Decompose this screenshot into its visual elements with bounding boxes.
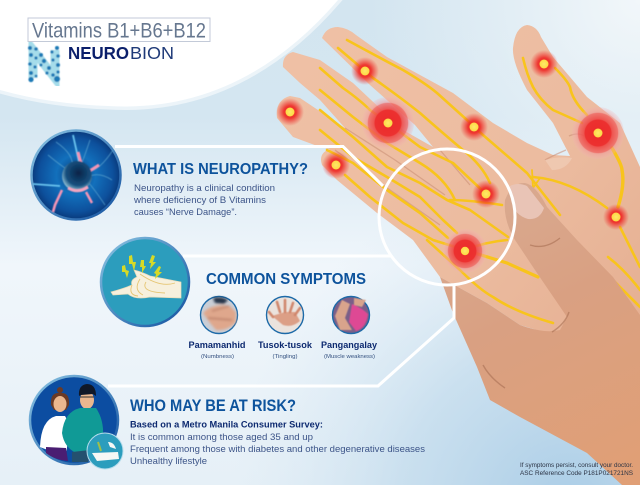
icon: tingling hand <box>101 238 189 326</box>
large pain point <box>443 229 487 273</box>
text: risk list: Frequent among those with diabetes and other degenerative diseases <box>130 444 425 455</box>
pain point <box>530 50 558 78</box>
footer note <box>520 462 634 477</box>
heading: common symptoms: COMMON SYMPTOMS <box>206 271 366 288</box>
man <box>62 384 103 462</box>
label: Pamamanhid <box>188 340 246 350</box>
heading: who may be at risk: WHO MAY BE AT RISK? <box>130 397 296 415</box>
text: neuropathy description <box>133 183 275 217</box>
hand with nerves <box>276 25 640 485</box>
vitamins text: Vitamins B1+B6+B12 <box>32 20 206 42</box>
pain point <box>472 180 500 208</box>
photo <box>200 296 238 334</box>
logo mark <box>28 46 60 82</box>
magnifier circle <box>379 149 515 285</box>
connector: neuropathy <box>115 146 383 186</box>
pain point <box>603 204 629 230</box>
photo <box>266 296 304 334</box>
text: neuropathy description: Neuropathy is a clinical condition <box>134 183 275 193</box>
heading: what is neuropathy: WHAT IS NEUROPATHY? <box>133 161 308 178</box>
footer note: ASC Reference Code P181P021721NS <box>520 470 634 477</box>
pain point <box>351 57 379 85</box>
text: risk list: It is common among those aged 35 and up <box>130 432 313 443</box>
small hand badge <box>87 433 123 469</box>
header white curve <box>0 0 338 107</box>
nerves <box>320 40 640 323</box>
icon: people at risk <box>30 376 123 469</box>
sublabel: (Numbness) <box>201 354 234 360</box>
finger shadow creases <box>335 128 584 225</box>
large pain point <box>362 97 414 149</box>
text: neuropathy description: causes “Nerve Damage”. <box>134 207 237 217</box>
brand name <box>68 43 174 63</box>
text: risk list <box>130 420 425 467</box>
text: risk list: Unhealthy lifestyle <box>130 456 207 467</box>
connector lines and magnifier <box>108 146 515 386</box>
pain point <box>276 98 304 126</box>
thumb knuckle creases <box>483 238 569 388</box>
connector: symptoms <box>183 254 391 258</box>
woman <box>40 387 70 461</box>
icon: neuron <box>32 130 120 220</box>
pain point <box>460 113 488 141</box>
pain points <box>276 50 629 273</box>
footer note: If symptoms persist, consult your doctor. <box>520 462 633 469</box>
symptom: muscle weakness <box>321 296 377 360</box>
examined hand silhouette <box>277 25 640 337</box>
connector: risk <box>108 285 454 386</box>
sublabel: (Muscle weakness) <box>324 354 375 360</box>
holding hand <box>440 183 640 485</box>
sublabel: (Tingling) <box>272 354 298 360</box>
brand name: BION <box>130 43 174 63</box>
thumbnail <box>510 184 544 219</box>
label: Tusok-tusok <box>258 340 313 350</box>
brand name: NEURO <box>68 43 129 63</box>
vitamins label <box>28 18 210 42</box>
brand box <box>28 18 210 42</box>
symptom: tingling <box>258 296 313 360</box>
text: neuropathy description: where deficiency of B Vitamins <box>133 195 266 205</box>
pain point <box>322 151 350 179</box>
large pain point <box>572 107 624 159</box>
palm fold highlight <box>545 157 572 170</box>
label: Pangangalay <box>321 340 377 350</box>
symptom: numbness <box>188 296 246 360</box>
text: risk list: Based on a Metro Manila Consumer Survey: <box>130 420 323 430</box>
photo <box>332 296 370 334</box>
